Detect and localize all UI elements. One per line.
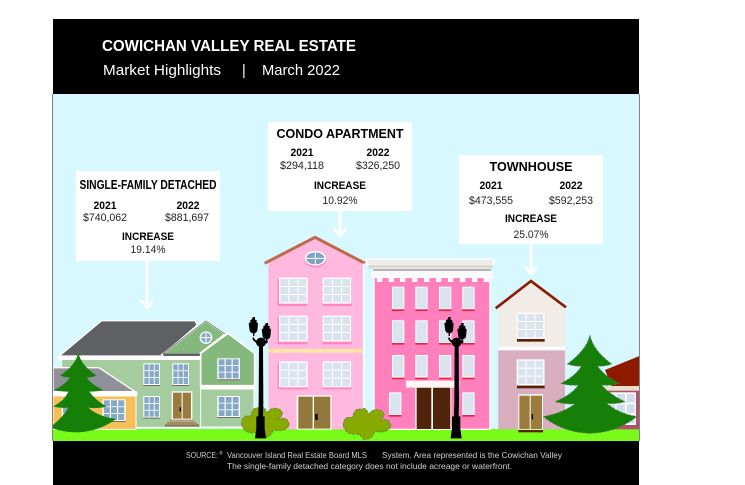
house: red house behind tree [603,356,639,429]
building: condo apartment [265,237,365,430]
title: COWICHAN VALLEY REAL ESTATE [102,38,356,55]
callout: single-family detached: SINGLE-FAMILY DETACHED [80,178,216,192]
footer disclaimer: The single-family detached category does not include acreage or waterfront. [227,461,512,471]
callout: condo apartment: $294,118 [280,160,324,172]
house: single-family detached [57,321,255,427]
callout: townhouse: 25.07% [514,229,549,241]
tree: right evergreen [543,335,637,433]
tree: left evergreen [53,352,116,432]
callout: townhouse [459,155,603,276]
callout: townhouse: 2022 [560,180,582,192]
callout: condo apartment: 2022 [366,147,390,159]
sky background [53,94,639,441]
callout: townhouse: $592,253 [549,195,593,207]
callout: single-family detached: $740,062 [83,212,127,224]
callout: condo apartment: 2021 [290,147,314,159]
subtitle: Market Highlights [103,63,221,79]
callout: townhouse: TOWNHOUSE [490,159,573,174]
source note: System. Area represented is the Cowichan Valley [382,450,563,460]
arrow: single-family [140,261,154,310]
callout: condo apartment: 10.92% [322,195,358,207]
callout: condo apartment [268,122,412,238]
callout: single-family detached: INCREASE [122,231,174,243]
arrow: condo [333,211,347,238]
header band [53,19,639,94]
side borders [52,94,640,441]
callout: single-family detached: 2021 [94,200,116,212]
arrow: townhouse [524,244,538,276]
callout: condo apartment: $326,250 [356,160,400,172]
callout: townhouse: 2021 [480,180,502,192]
callout: townhouse: INCREASE [505,213,557,225]
grass [53,429,639,441]
source note: ® [219,450,223,457]
shrubs [242,407,391,439]
street lamps [249,317,467,438]
source note [186,450,563,460]
subtitle [103,63,340,79]
subtitle: | [242,63,246,79]
source note: Vancouver Island Real Estate Board MLS [227,450,367,460]
source note: SOURCE: [186,450,218,460]
callout: single-family detached: 19.14% [130,244,166,256]
footer band [53,441,639,485]
building: townhouse [496,281,566,432]
callout: single-family detached: $881,697 [165,212,209,224]
house: small yellow wing [53,368,137,429]
callout: condo apartment: INCREASE [314,180,366,192]
callout: single-family detached [76,171,220,310]
subtitle: March 2022 [262,63,340,79]
building: pink apartment block [366,258,495,429]
callout: condo apartment: CONDO APARTMENT [276,126,404,141]
callout: townhouse: $473,555 [469,195,513,207]
callout: single-family detached: 2022 [176,200,200,212]
